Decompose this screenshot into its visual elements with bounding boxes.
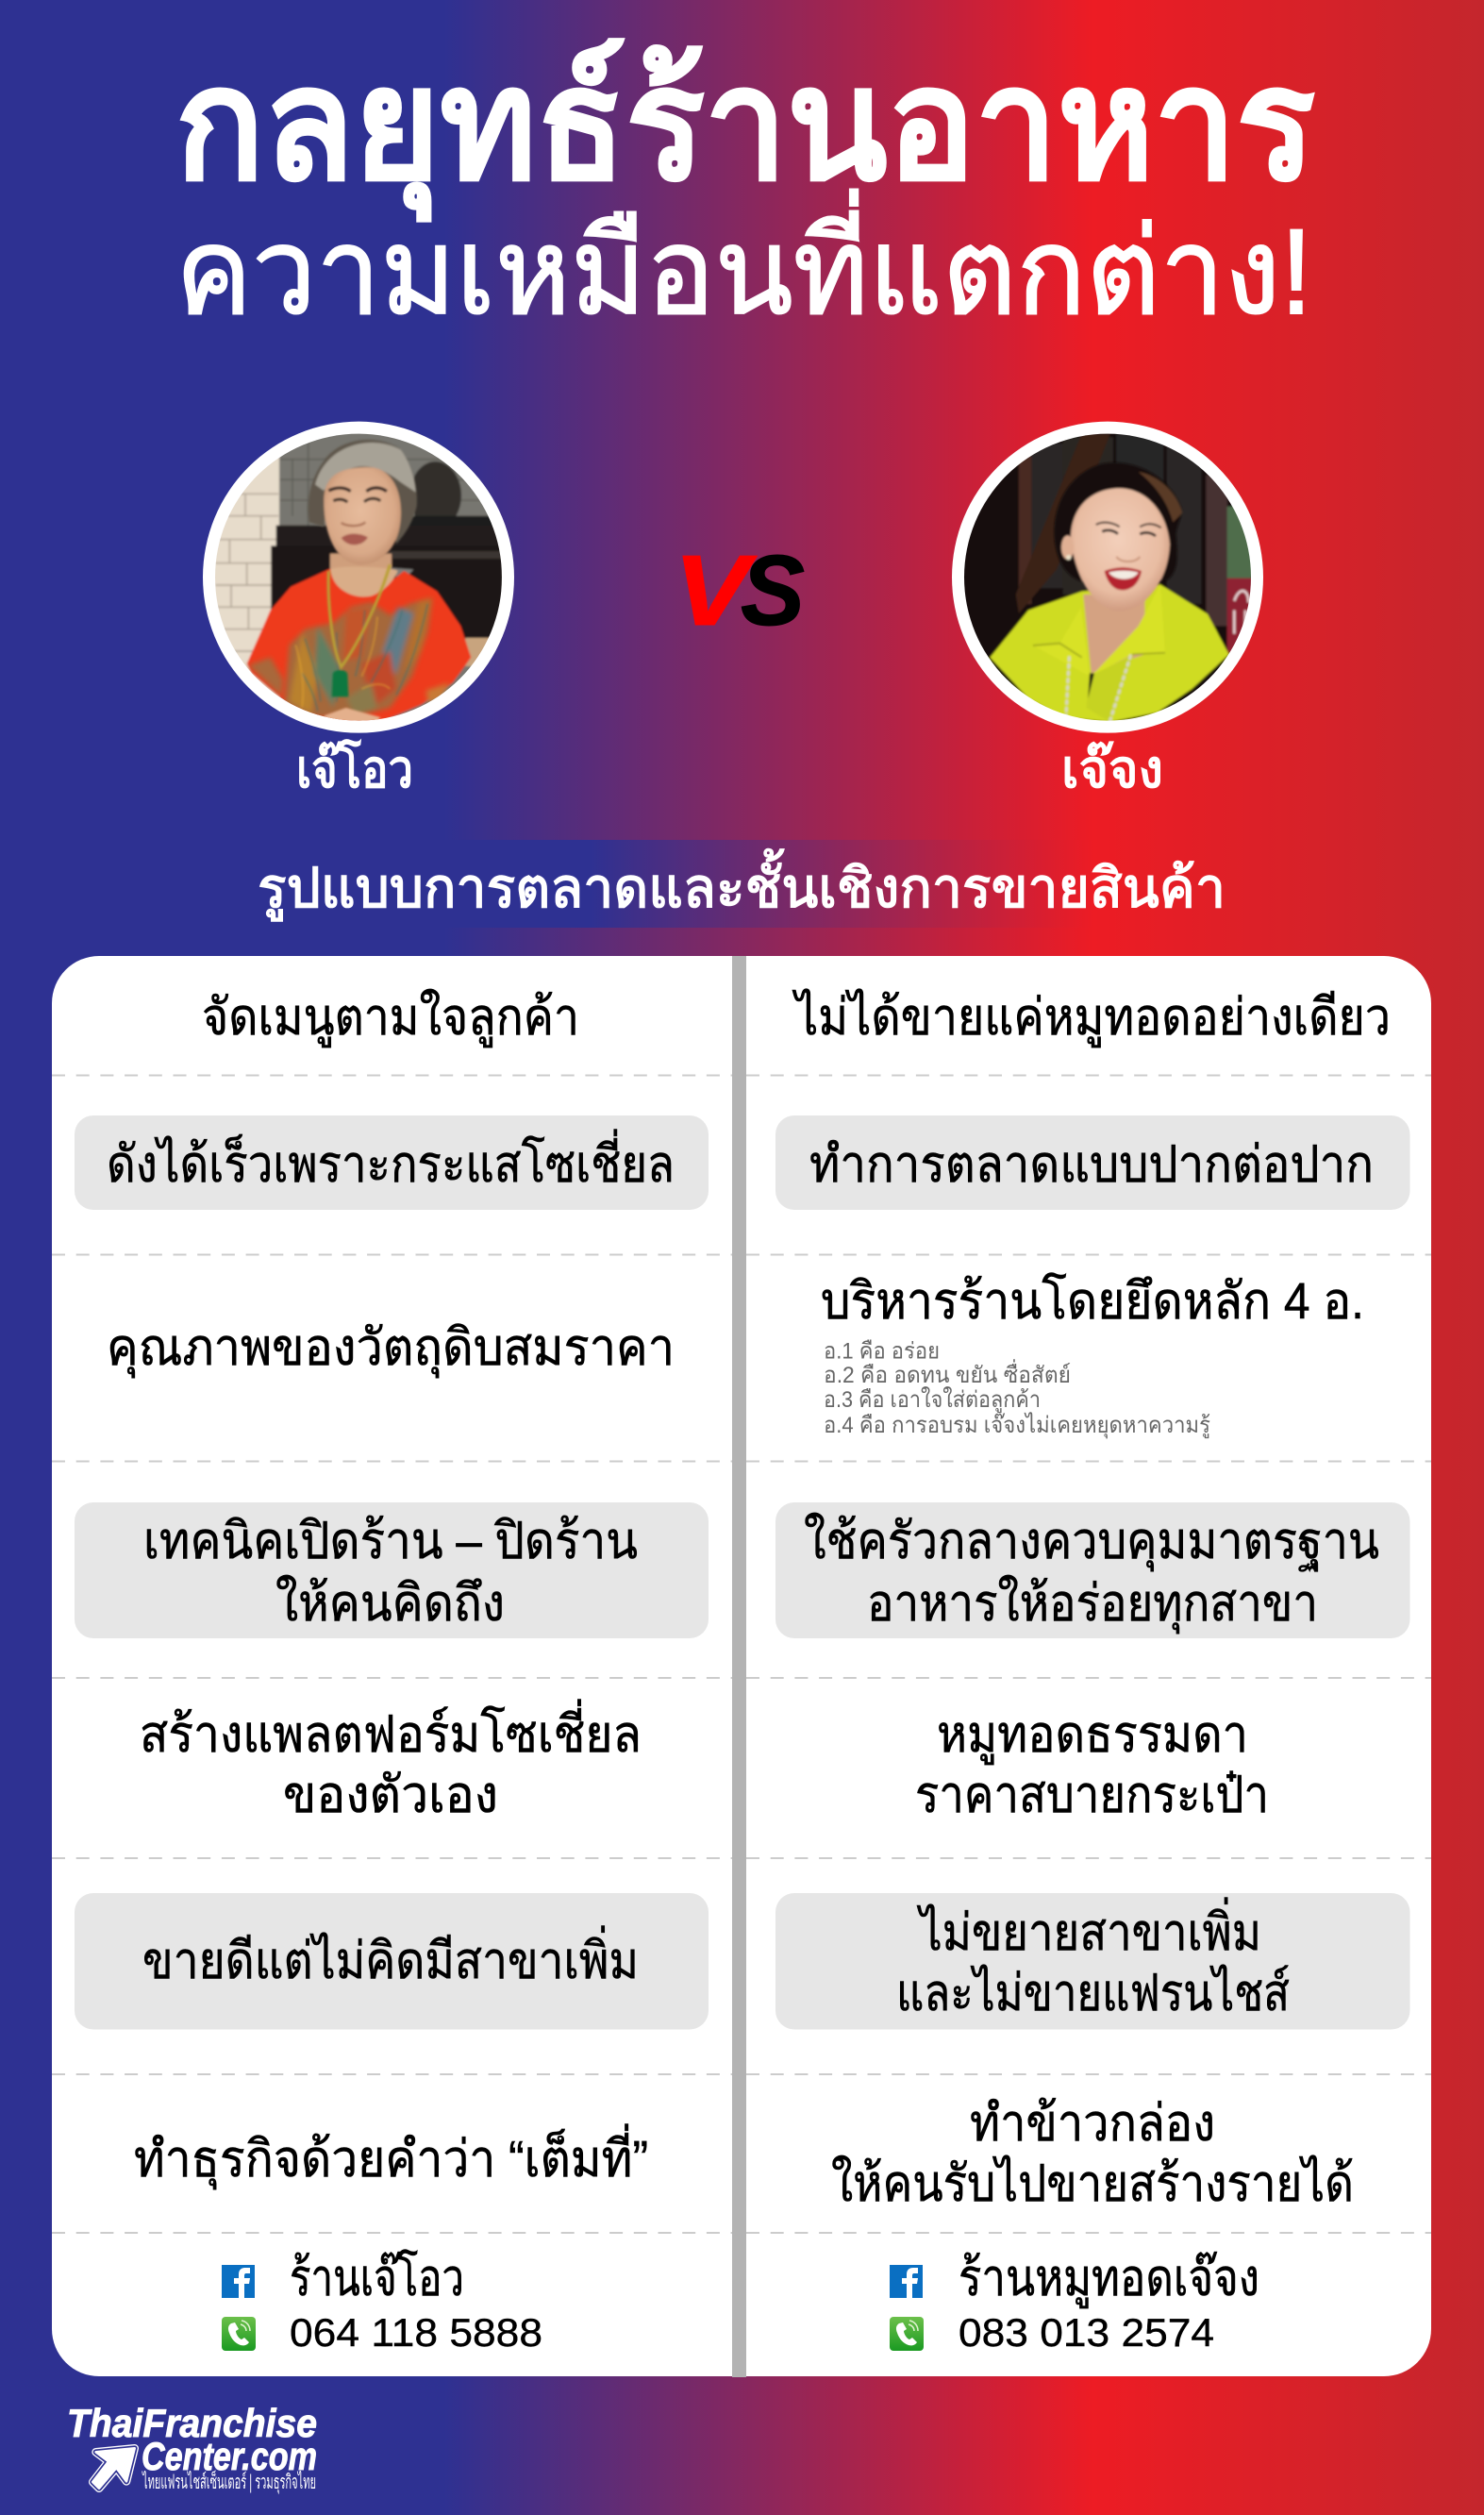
icon: phone	[222, 2317, 256, 2351]
column: เจ๊จง strategies: ทำข้าวกล่อง	[970, 2095, 1215, 2152]
column: เจ๊โอว strategies: จัดเมนูตามใจลูกค้า	[202, 988, 579, 1048]
phone number: 064 118 5888	[290, 2310, 542, 2355]
title: ความเหมือนที่แตกต่าง!	[175, 189, 1312, 340]
column: เจ๊จง strategies: ทำการตลาดแบบปากต่อปาก	[809, 1136, 1374, 1193]
column: เจ๊โอว strategies: เทคนิคเปิดร้าน – ปิดร้าน	[143, 1513, 638, 1569]
portrait: เจ๊จง	[952, 422, 1263, 733]
logo: ThaiFranchise Center: ThaiFranchise	[67, 2401, 317, 2445]
icon: logo arrow	[92, 2448, 135, 2489]
column: เจ๊จง strategies	[792, 988, 1391, 2212]
column: เจ๊โอว strategies: ขายดีแต่ไม่คิดมีสาขาเพิ่ม	[142, 1925, 639, 1989]
text block: หลัก 4 อ. details: อ.2 คือ อดทน ขยัน ซื่อสัตย์	[824, 1359, 1071, 1388]
panel: comparison table	[52, 956, 1431, 2377]
column: เจ๊จง strategies: บริหารร้านโดยยึดหลัก 4 อ.	[821, 1272, 1364, 1330]
logo: ThaiFranchise Center: ไทยแฟรนไชส์เซ็นเตอร์ | รวมธุรกิจไทย	[142, 2469, 316, 2494]
column: เจ๊จง strategies: ไม่ขยายสาขาเพิ่ม	[916, 1897, 1261, 1961]
portrait: เจ๊โอว	[203, 422, 514, 733]
icon: phone	[890, 2317, 924, 2351]
text block: หลัก 4 อ. details	[824, 1338, 1210, 1439]
title: กลยุทธ์ร้านอาหาร	[175, 38, 1315, 222]
phone number: 083 013 2574	[959, 2310, 1214, 2355]
title	[175, 38, 1315, 340]
shop name: ร้านเจ๊โอว	[290, 2249, 464, 2306]
VS mark: S	[741, 535, 805, 646]
VS mark	[674, 535, 805, 646]
icon: facebook	[890, 2265, 923, 2298]
column: เจ๊จง strategies: ใช้ครัวกลางควบคุมมาตรฐาน	[804, 1512, 1379, 1572]
shop name: ร้านหมูทอดเจ๊จง	[959, 2250, 1259, 2308]
heading band	[258, 840, 1226, 928]
VS mark: V	[674, 535, 758, 646]
column: เจ๊โอว strategies: คุณภาพของวัตถุดิบสมราคา	[107, 1319, 675, 1379]
column: เจ๊โอว strategies	[107, 988, 675, 2190]
contact: ร้านหมูทอดเจ๊จง	[890, 2250, 1259, 2355]
column: เจ๊จง strategies: ให้คนรับไปขายสร้างรายได้	[831, 2155, 1354, 2212]
column: เจ๊จง strategies: หมูทอดธรรมดา	[937, 1706, 1248, 1765]
column: เจ๊โอว strategies: ทำธุรกิจด้วยคำว่า “เต็มที่”	[134, 2123, 648, 2190]
contact: ร้านเจ๊โอว	[222, 2249, 542, 2355]
text block: หลัก 4 อ. details: อ.1 คือ อร่อย	[824, 1338, 940, 1365]
logo: ThaiFranchise Center	[67, 2401, 317, 2494]
column: เจ๊โอว strategies: ดังได้เร็วเพราะกระแสโซเชี่ยล	[107, 1129, 675, 1193]
heading band: รูปแบบการตลาดและชั้นเชิงการขายสินค้า	[258, 849, 1226, 921]
name: เจ๊โอว: เจ๊โอว	[296, 738, 413, 798]
logo: ThaiFranchise Center: Center.com	[142, 2434, 317, 2478]
column: เจ๊จง strategies: และไม่ขายแฟรนไชส์	[896, 1964, 1290, 2021]
column: เจ๊จง strategies: อาหารให้อร่อยทุกสาขา	[867, 1574, 1318, 1635]
column: เจ๊โอว strategies: สร้างแพลตฟอร์มโซเชี่ยล	[140, 1699, 642, 1763]
column: เจ๊จง strategies: ราคาสบายกระเป๋า	[915, 1767, 1269, 1823]
text block: หลัก 4 อ. details: อ.4 คือ การอบรม เจ๊จงไม่เคยหยุดหาความรู้	[824, 1412, 1210, 1439]
column: เจ๊จง strategies: ไม่ได้ขายแค่หมูทอดอย่างเดียว	[792, 988, 1391, 1048]
name: เจ๊จง: เจ๊จง	[1061, 739, 1163, 798]
column: เจ๊โอว strategies: ของตัวเอง	[283, 1767, 498, 1823]
icon: facebook	[222, 2265, 255, 2298]
column: เจ๊โอว strategies: ให้คนคิดถึง	[275, 1574, 505, 1632]
text block: หลัก 4 อ. details: อ.3 คือ เอาใจใส่ต่อลูกค้า	[824, 1386, 1041, 1414]
